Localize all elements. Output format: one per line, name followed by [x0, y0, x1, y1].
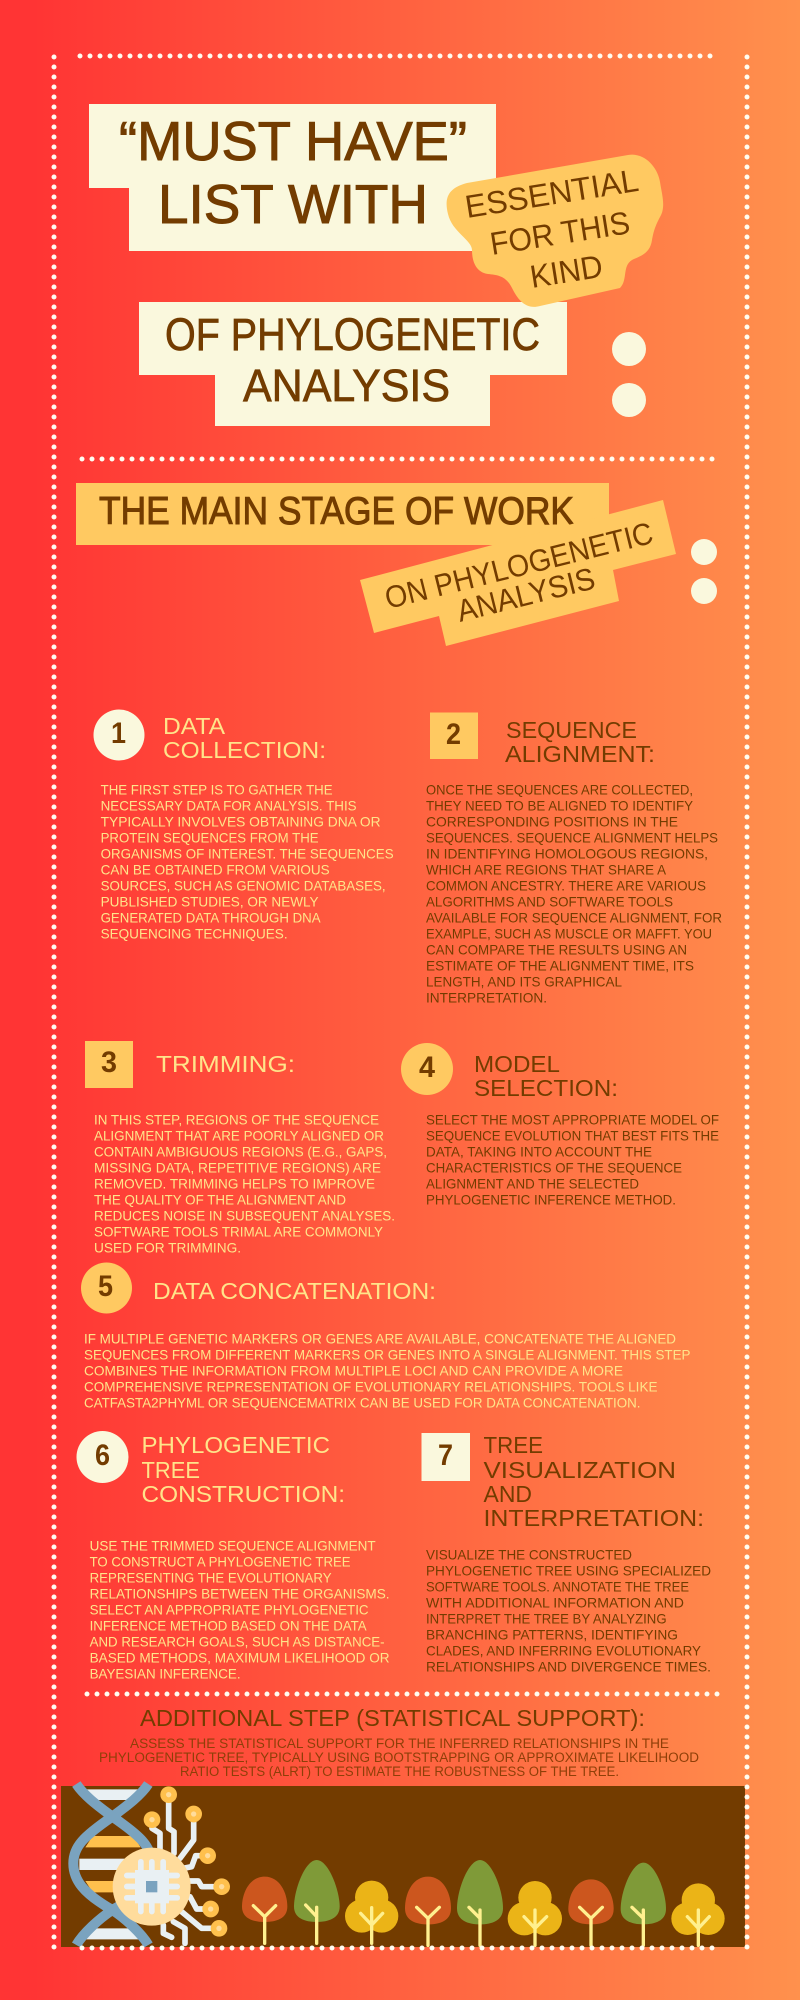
body text 4: CHARACTERISTICS OF THE SEQUENCE: [426, 1160, 682, 1176]
body text 7: VISUALIZE THE CONSTRUCTED: [426, 1547, 632, 1563]
heading 3: TRIMMING:: [156, 1051, 295, 1077]
number badge 2: [430, 712, 478, 759]
additional step body: [99, 1736, 699, 1779]
tree 7: [568, 1879, 614, 1945]
heading 4: MODEL: [474, 1051, 560, 1077]
heading 6: TREE: [142, 1457, 200, 1483]
section 6: phylogenetic tree construction: [76, 1431, 390, 1682]
tree 6: [508, 1881, 562, 1945]
body text 3: IN THIS STEP, REGIONS OF THE SEQUENCE: [94, 1112, 379, 1128]
tree 1: [242, 1877, 287, 1943]
body text 1: THE FIRST STEP IS TO GATHER THE: [101, 782, 333, 798]
number badge 7: 7: [438, 1439, 453, 1472]
body text 6: BAYESIAN INFERENCE.: [90, 1666, 241, 1682]
banner text: THE MAIN STAGE OF WORK: [99, 490, 574, 533]
body text 6: INFERENCE METHOD BASED ON THE DATA: [90, 1618, 367, 1634]
heading 2: ALIGNMENT:: [505, 741, 655, 767]
heading 5: DATA CONCATENATION:: [153, 1278, 436, 1304]
body text 4: PHYLOGENETIC INFERENCE METHOD.: [426, 1192, 676, 1208]
body text 2: IN IDENTIFYING HOMOLOGOUS REGIONS,: [426, 846, 708, 862]
body text 3: ALIGNMENT THAT ARE POORLY ALIGNED OR: [94, 1128, 384, 1144]
body text 2: ALGORITHMS AND SOFTWARE TOOLS: [426, 894, 673, 910]
body text 2: LENGTH, AND ITS GRAPHICAL: [426, 974, 622, 990]
circuit traces: [152, 1802, 215, 1943]
heading 2: SEQUENCE: [506, 717, 637, 743]
title block: [89, 104, 567, 426]
body text 7: RELATIONSHIPS AND DIVERGENCE TIMES.: [426, 1659, 711, 1675]
microchip: [113, 1848, 191, 1926]
decorative colon: title: [612, 332, 646, 417]
banner rectangle: [76, 483, 609, 545]
body text 2: [426, 782, 722, 1006]
title line 2: LIST WITH: [158, 173, 428, 235]
body text 6: AND RESEARCH GOALS, SUCH AS DISTANCE-: [90, 1634, 385, 1650]
decorative colon: banner: [691, 539, 717, 604]
tree 3: [345, 1881, 398, 1943]
heading 1: [163, 713, 326, 763]
title line 4: ANALYSIS: [243, 360, 450, 411]
heading 7: INTERPRETATION:: [484, 1505, 704, 1531]
title banner: lower shape: [139, 302, 567, 426]
title line 3: OF PHYLOGENETIC: [165, 309, 540, 360]
body text 7: INTERPRET THE TREE BY ANALYZING: [426, 1611, 667, 1627]
body text 7: WITH ADDITIONAL INFORMATION AND: [426, 1595, 684, 1611]
body text 6: TO CONSTRUCT A PHYLOGENETIC TREE: [90, 1554, 351, 1570]
heading 2: [505, 717, 655, 767]
heading 7: TREE: [484, 1432, 543, 1458]
DNA strands: [73, 1784, 151, 1945]
body text 5: COMPREHENSIVE REPRESENTATION OF EVOLUTIONARY RELATIONSHIPS. TOOLS LIKE: [84, 1379, 658, 1395]
body text 4: [426, 1112, 719, 1208]
body text 3: THE QUALITY OF THE ALIGNMENT AND: [94, 1192, 346, 1208]
body text 5: COMBINES THE INFORMATION FROM MULTIPLE LOCI AND CAN PROVIDE A MORE: [84, 1363, 623, 1379]
number badge 6: [76, 1431, 128, 1483]
body text 7: CLADES, AND INFERRING EVOLUTIONARY: [426, 1643, 702, 1659]
tree 8: [621, 1863, 666, 1945]
section 2: sequence alignment: [426, 712, 722, 1006]
section 3: trimming: [85, 1041, 395, 1256]
body text 1: PUBLISHED STUDIES, OR NEWLY: [101, 894, 319, 910]
body text 6: [90, 1538, 390, 1682]
body text 7: PHYLOGENETIC TREE USING SPECIALIZED: [426, 1563, 711, 1579]
body text 1: NECESSARY DATA FOR ANALYSIS. THIS: [101, 798, 357, 814]
section 1: data collection: [94, 710, 394, 942]
body text 6: REPRESENTING THE EVOLUTIONARY: [90, 1570, 332, 1586]
heading 4: SELECTION:: [474, 1075, 618, 1101]
sticker text: FOR THIS: [487, 204, 632, 262]
body text 2: CORRESPONDING POSITIONS IN THE: [426, 814, 678, 830]
tilted banner line 1: ON PHYLOGENETIC: [381, 515, 657, 616]
body text 2: THEY NEED TO BE ALIGNED TO IDENTIFY: [426, 798, 694, 814]
body text 1: CAN BE OBTAINED FROM VARIOUS: [101, 862, 330, 878]
body text 6: RELATIONSHIPS BETWEEN THE ORGANISMS.: [90, 1586, 390, 1602]
body text 2: INTERPRETATION.: [426, 990, 547, 1006]
heading 4: [474, 1051, 618, 1101]
body text 1: GENERATED DATA THROUGH DNA: [101, 910, 321, 926]
tree 4: [405, 1877, 451, 1945]
trees row: right group: [405, 1860, 725, 1945]
body text 5: SEQUENCES FROM DIFFERENT MARKERS OR GENES INTO A SINGLE ALIGNMENT. THIS STEP: [84, 1347, 690, 1363]
heading 1: DATA: [163, 713, 226, 739]
additional step body: ASSESS THE STATISTICAL SUPPORT FOR THE INFERRED RELATIONSHIPS IN THE: [130, 1736, 669, 1751]
sticker text: [462, 162, 641, 295]
body text 5: [84, 1331, 690, 1411]
body text 1: SEQUENCING TECHNIQUES.: [101, 926, 288, 942]
body text 4: SEQUENCE EVOLUTION THAT BEST FITS THE: [426, 1128, 719, 1144]
body text 1: PROTEIN SEQUENCES FROM THE: [101, 830, 319, 846]
number badge 5: [81, 1262, 132, 1314]
number badge 3: [85, 1041, 133, 1088]
body text 6: SELECT AN APPROPRIATE PHYLOGENETIC: [90, 1602, 369, 1618]
tree 2: [294, 1860, 340, 1943]
body text 7: BRANCHING PATTERNS, IDENTIFYING: [426, 1627, 678, 1643]
number badge 4: [401, 1043, 453, 1095]
additional step section: [99, 1705, 699, 1779]
DNA rungs: [79, 1789, 147, 1939]
body text 2: ONCE THE SEQUENCES ARE COLLECTED,: [426, 782, 693, 798]
body text 2: CAN COMPARE THE RESULTS USING AN: [426, 942, 687, 958]
number badge 1: [94, 710, 144, 760]
body text 4: ALIGNMENT AND THE SELECTED: [426, 1176, 639, 1192]
body text 7: [426, 1547, 711, 1675]
body text 5: CATFASTA2PHYML OR SEQUENCEMATRIX CAN BE USED FOR DATA CONCATENATION.: [84, 1395, 640, 1411]
number badge 6: 6: [95, 1439, 110, 1472]
heading 6: [142, 1432, 345, 1507]
body text 2: EXAMPLE, SUCH AS MUSCLE OR MAFFT. YOU: [426, 926, 712, 942]
heading 6: PHYLOGENETIC: [142, 1432, 330, 1458]
tilted banner line 2: ANALYSIS: [453, 561, 599, 629]
circuit nodes: [144, 1786, 230, 1937]
section 5: data concatenation: [81, 1262, 690, 1411]
sticker blob: [447, 155, 663, 307]
number badge 1: 1: [111, 717, 126, 750]
heading 6: CONSTRUCTION:: [142, 1481, 345, 1507]
heading 7: AND: [484, 1481, 532, 1507]
body text 3: REMOVED. TRIMMING HELPS TO IMPROVE: [94, 1176, 375, 1192]
body text 4: SELECT THE MOST APPROPRIATE MODEL OF: [426, 1112, 719, 1128]
body text 1: [101, 782, 394, 942]
tree 9: [671, 1883, 725, 1945]
body text 1: TYPICALLY INVOLVES OBTAINING DNA OR: [101, 814, 381, 830]
sticker text: ESSENTIAL: [462, 162, 641, 225]
section 7: tree visualization and interpretation: [422, 1432, 711, 1675]
number badge 5: 5: [98, 1270, 113, 1303]
body text 1: ORGANISMS OF INTEREST. THE SEQUENCES: [101, 846, 394, 862]
body text 2: COMMON ANCESTRY. THERE ARE VARIOUS: [426, 878, 706, 894]
additional step body: PHYLOGENETIC TREE, TYPICALLY USING BOOTSTRAPPING OR APPROXIMATE LIKELIHOOD: [99, 1750, 699, 1765]
tilted banner shape: [360, 500, 676, 646]
body text 6: USE THE TRIMMED SEQUENCE ALIGNMENT: [90, 1538, 376, 1554]
body text 3: REDUCES NOISE IN SUBSEQUENT ANALYSES.: [94, 1208, 395, 1224]
body text 3: MISSING DATA, REPETITIVE REGIONS) ARE: [94, 1160, 381, 1176]
body text 2: SEQUENCES. SEQUENCE ALIGNMENT HELPS: [426, 830, 718, 846]
body text 5: IF MULTIPLE GENETIC MARKERS OR GENES ARE AVAILABLE, CONCATENATE THE ALIGNED: [84, 1331, 676, 1347]
body text 1: SOURCES, SUCH AS GENOMIC DATABASES,: [101, 878, 386, 894]
number badge 3: 3: [101, 1046, 117, 1079]
body text 3: [94, 1112, 395, 1256]
sticker: essential for this kind: [447, 155, 663, 307]
body text 3: CONTAIN AMBIGUOUS REGIONS (E.G., GAPS,: [94, 1144, 387, 1160]
bottom illustration panel: [61, 1786, 745, 1947]
number badge 2: 2: [446, 718, 461, 751]
body text 2: AVAILABLE FOR SEQUENCE ALIGNMENT, FOR: [426, 910, 722, 926]
body text 4: DATA, TAKING INTO ACCOUNT THE: [426, 1144, 652, 1160]
heading 1: COLLECTION:: [163, 737, 326, 763]
banner: main stage of work: [76, 483, 609, 545]
body text 3: SOFTWARE TOOLS TRIMAL ARE COMMONLY: [94, 1224, 384, 1240]
heading 7: VISUALIZATION: [484, 1457, 676, 1483]
body text 2: ESTIMATE OF THE ALIGNMENT TIME, ITS: [426, 958, 694, 974]
body text 6: BASED METHODS, MAXIMUM LIKELIHOOD OR: [90, 1650, 390, 1666]
trees row: left group: [242, 1860, 398, 1943]
section 4: model selection: [401, 1043, 719, 1208]
body text 2: WHICH ARE REGIONS THAT SHARE A: [426, 862, 667, 878]
number badge 4: 4: [419, 1051, 435, 1084]
title banner: upper shape: [89, 104, 496, 251]
tree 5: [457, 1860, 503, 1945]
additional step heading: ADDITIONAL STEP (STATISTICAL SUPPORT):: [140, 1705, 645, 1731]
icon: DNA helix with microchip: [73, 1784, 230, 1945]
title line 1: “MUST HAVE”: [119, 110, 467, 172]
sticker text: KIND: [527, 248, 605, 295]
additional step body: RATIO TESTS (ALRT) TO ESTIMATE THE ROBUSTNESS OF THE TREE.: [180, 1764, 619, 1779]
body text 7: SOFTWARE TOOLS. ANNOTATE THE TREE: [426, 1579, 689, 1595]
heading 7: [484, 1432, 704, 1531]
tilted banner: on phylogenetic analysis: [360, 500, 676, 646]
body text 3: USED FOR TRIMMING.: [94, 1240, 241, 1256]
number badge 7: [422, 1433, 470, 1481]
